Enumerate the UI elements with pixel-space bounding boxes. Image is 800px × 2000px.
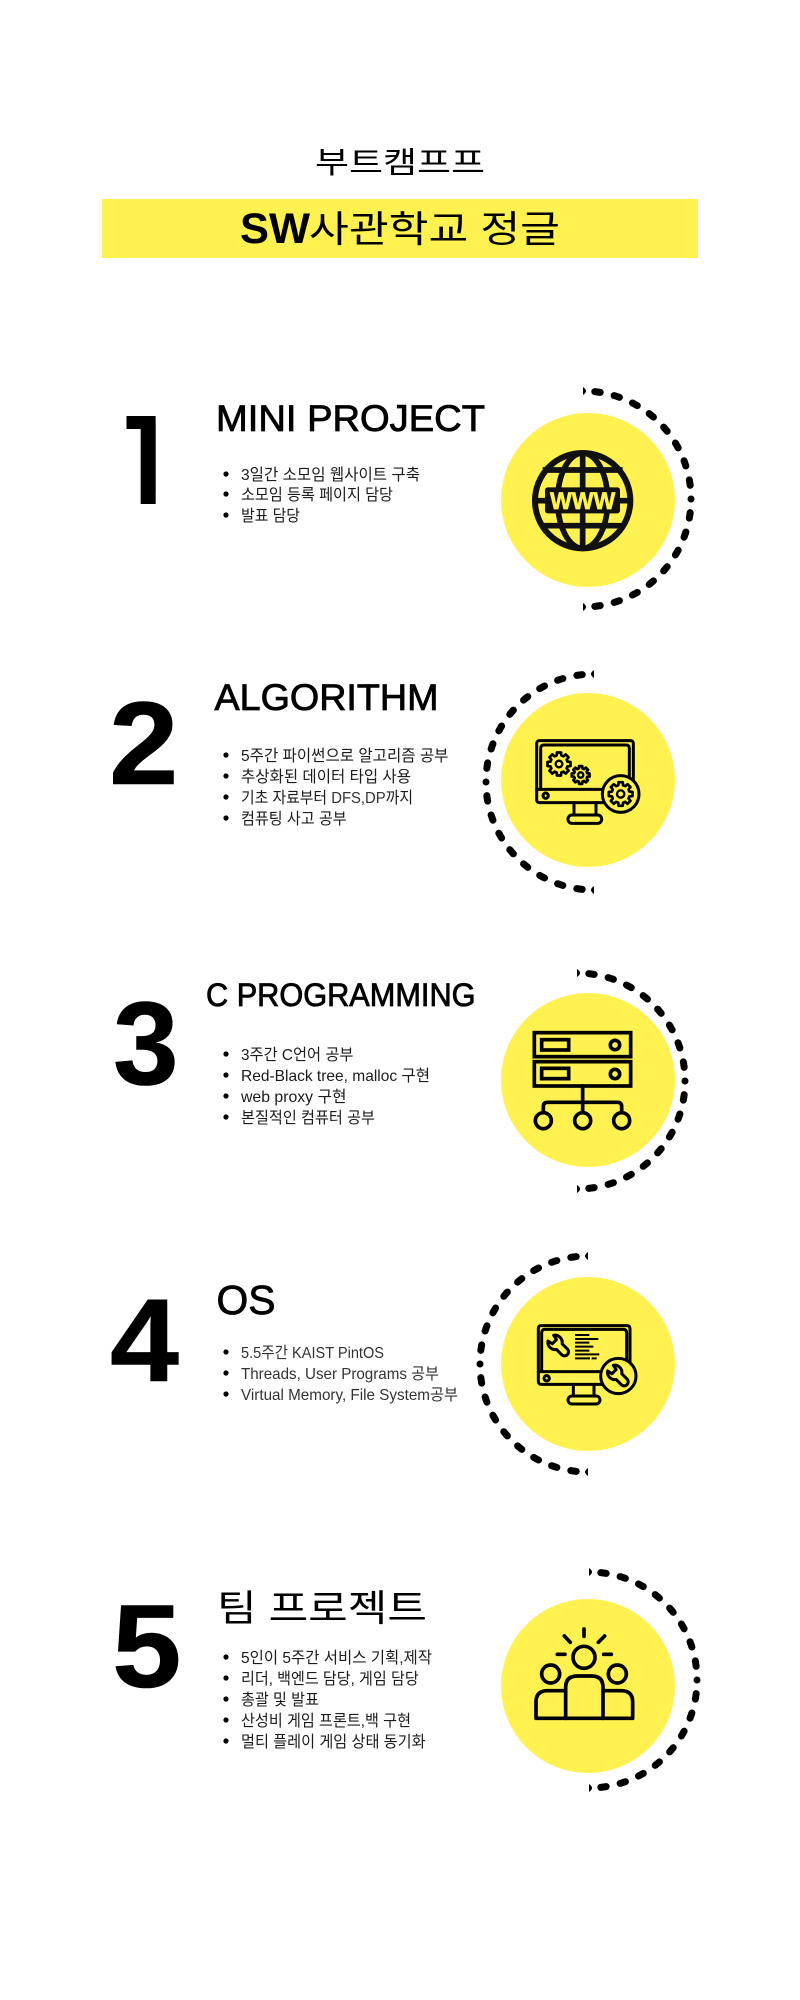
dashed arc 3 — [577, 969, 688, 1193]
bullet list 5: 5인이 5주간 서비스 기획,제작 — [241, 1649, 432, 1667]
bullet list 1: 3일간 소모임 웹사이트 구축 — [241, 466, 420, 484]
heading: os: OS — [216, 1277, 276, 1323]
icon: team people — [536, 1629, 633, 1718]
dashed arc 5 — [589, 1568, 700, 1792]
bullet list 5: 총괄 및 발표 — [241, 1691, 319, 1709]
bullet list 1: 소모임 등록 페이지 담당 — [241, 486, 393, 504]
bullet list 2: 컴퓨팅 사고 공부 — [241, 810, 347, 828]
bullet list 5 — [223, 1649, 432, 1751]
yellow circle 2 — [501, 693, 675, 867]
panel: section 3 c programming — [113, 969, 688, 1193]
yellow circle 3 — [501, 993, 675, 1167]
heading: c programming: C PROGRAMMING — [206, 977, 476, 1013]
panel: section 5 team project — [112, 1568, 700, 1792]
icon: www globe — [533, 452, 632, 550]
icon: monitor with wrench — [538, 1326, 636, 1404]
bullet list 5: 리더, 백엔드 담당, 게임 담당 — [241, 1670, 419, 1688]
bullet list 2: 5주간 파이썬으로 알고리즘 공부 — [241, 747, 448, 765]
number 3: 3 — [113, 978, 179, 1110]
heading banner: SW사관학교 정글 — [102, 199, 698, 258]
bullet list 2: 기초 자료부터 DFS,DP까지 — [241, 789, 413, 807]
bullet list 4: 5.5주간 KAIST PintOS — [241, 1344, 384, 1362]
dashed arc 1 — [583, 387, 694, 611]
dashed arc 2 — [482, 670, 594, 894]
heading: team project: 팀 프로젝트 — [217, 1588, 427, 1629]
bullet list 3: 3주간 C언어 공부 — [241, 1046, 354, 1064]
dashed arc 4 — [476, 1252, 588, 1476]
bullet list 5: 산성비 게임 프론트,백 구현 — [241, 1712, 411, 1730]
number 4: 4 — [110, 1275, 179, 1407]
number 2: 2 — [109, 678, 178, 810]
yellow circle 5 — [501, 1599, 675, 1773]
bullet list 1 — [223, 466, 420, 525]
bullet list 3 — [223, 1046, 430, 1127]
yellow circle 1 — [501, 413, 675, 587]
number 1 — [126, 416, 156, 504]
panel: section 2 algorithm — [109, 670, 675, 894]
bullet list 4 — [223, 1344, 458, 1404]
heading: algorithm: ALGORITHM — [214, 677, 438, 718]
title: bootcamp: 부트캠프프 — [315, 147, 485, 180]
icon: monitor with gears — [537, 741, 639, 823]
heading banner: SW사관학교 정글: SW — [240, 205, 310, 253]
number 1: 1 — [112, 398, 178, 530]
bullet list 3: 본질적인 컴퓨터 공부 — [241, 1109, 375, 1127]
icon: server network — [534, 1033, 631, 1129]
bullet list 2: 추상화된 데이터 타입 사용 — [241, 768, 411, 786]
number 5: 5 — [112, 1581, 182, 1713]
bullet list 4: Virtual Memory, File System공부 — [241, 1387, 458, 1404]
panel: section 1 mini project — [112, 387, 694, 611]
heading banner: SW사관학교 정글: 사관학교 정글 — [309, 209, 560, 250]
bullet list 1: 발표 담당 — [241, 507, 300, 525]
bullet list 3: Red-Black tree, malloc 구현 — [241, 1067, 430, 1085]
bullet list 4: Threads, User Programs 공부 — [241, 1366, 439, 1383]
heading: mini project: MINI PROJECT — [216, 398, 485, 439]
panel: section 4 os — [110, 1252, 675, 1476]
bullet list 5: 멀티 플레이 게임 상태 동기화 — [241, 1733, 426, 1751]
bullet list 3: web proxy 구현 — [240, 1088, 347, 1106]
yellow circle 4 — [501, 1277, 675, 1451]
bullet list 2 — [223, 747, 448, 828]
icon: www globe: WWW — [550, 488, 616, 515]
